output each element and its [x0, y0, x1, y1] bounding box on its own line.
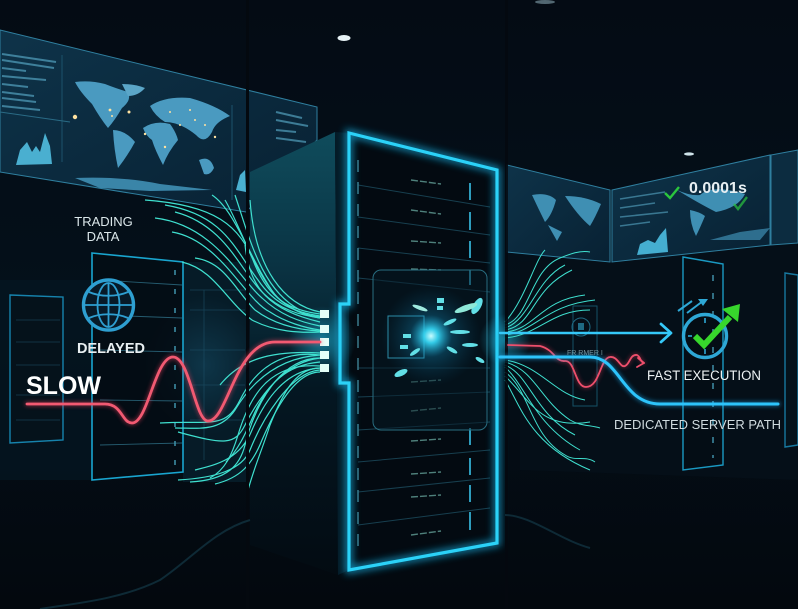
left wall screen with world map: [0, 30, 317, 212]
glass panel mullions: [246, 0, 508, 609]
panel text rows: [2, 54, 308, 142]
fast cyan arrow: [500, 324, 671, 342]
dedicated server path line: [500, 357, 778, 404]
central glow burst: [381, 286, 481, 386]
ceiling lights: [338, 0, 694, 156]
icon: green ticks: [665, 187, 747, 209]
mini chart: [637, 228, 668, 255]
small security panel: [572, 306, 597, 406]
left data fibres: [145, 195, 320, 490]
map data points: [73, 109, 216, 148]
label: data: DATA: [87, 229, 120, 244]
rack status bars: [469, 183, 471, 530]
rack shelves: [358, 185, 490, 525]
rack label rows: [411, 180, 441, 535]
rack outline: right: [683, 257, 723, 470]
label: fast execution: FAST EXECUTION: [647, 368, 761, 383]
floor cables: [40, 515, 590, 609]
rack front: [349, 133, 497, 570]
mini area chart: [16, 133, 52, 165]
label: slow: SLOW: [26, 372, 101, 400]
map land: [532, 189, 770, 241]
rack side wall: [250, 132, 338, 575]
central server rack: [250, 132, 531, 575]
connector ports: [320, 310, 329, 372]
label: latency value: 0.0001s: [689, 180, 747, 197]
label: delayed: DELAYED: [77, 341, 145, 357]
glow at right port: [479, 314, 531, 366]
rack neon frame: [340, 133, 497, 570]
right data fibres: [505, 250, 600, 470]
left port glow: [288, 306, 356, 374]
icon: globe: [84, 280, 134, 330]
rack neon frame glow: [340, 133, 497, 570]
label: trading data: TRADING: [74, 214, 133, 229]
label: faint overlaid text: FR RMER I: [567, 350, 603, 357]
burst fragments: [393, 296, 485, 379]
icon: stopwatch with green check: [678, 299, 740, 358]
red wavering line, right: [508, 345, 644, 387]
rack outline: left: [92, 253, 183, 480]
background server racks: [0, 245, 798, 482]
map land: [75, 81, 230, 191]
label: dedicated server path: DEDICATED SERVER PATH: [614, 417, 781, 432]
inner data panel: [373, 270, 487, 430]
slow red latency line: [27, 342, 320, 423]
right wall screens with maps: [507, 150, 798, 262]
